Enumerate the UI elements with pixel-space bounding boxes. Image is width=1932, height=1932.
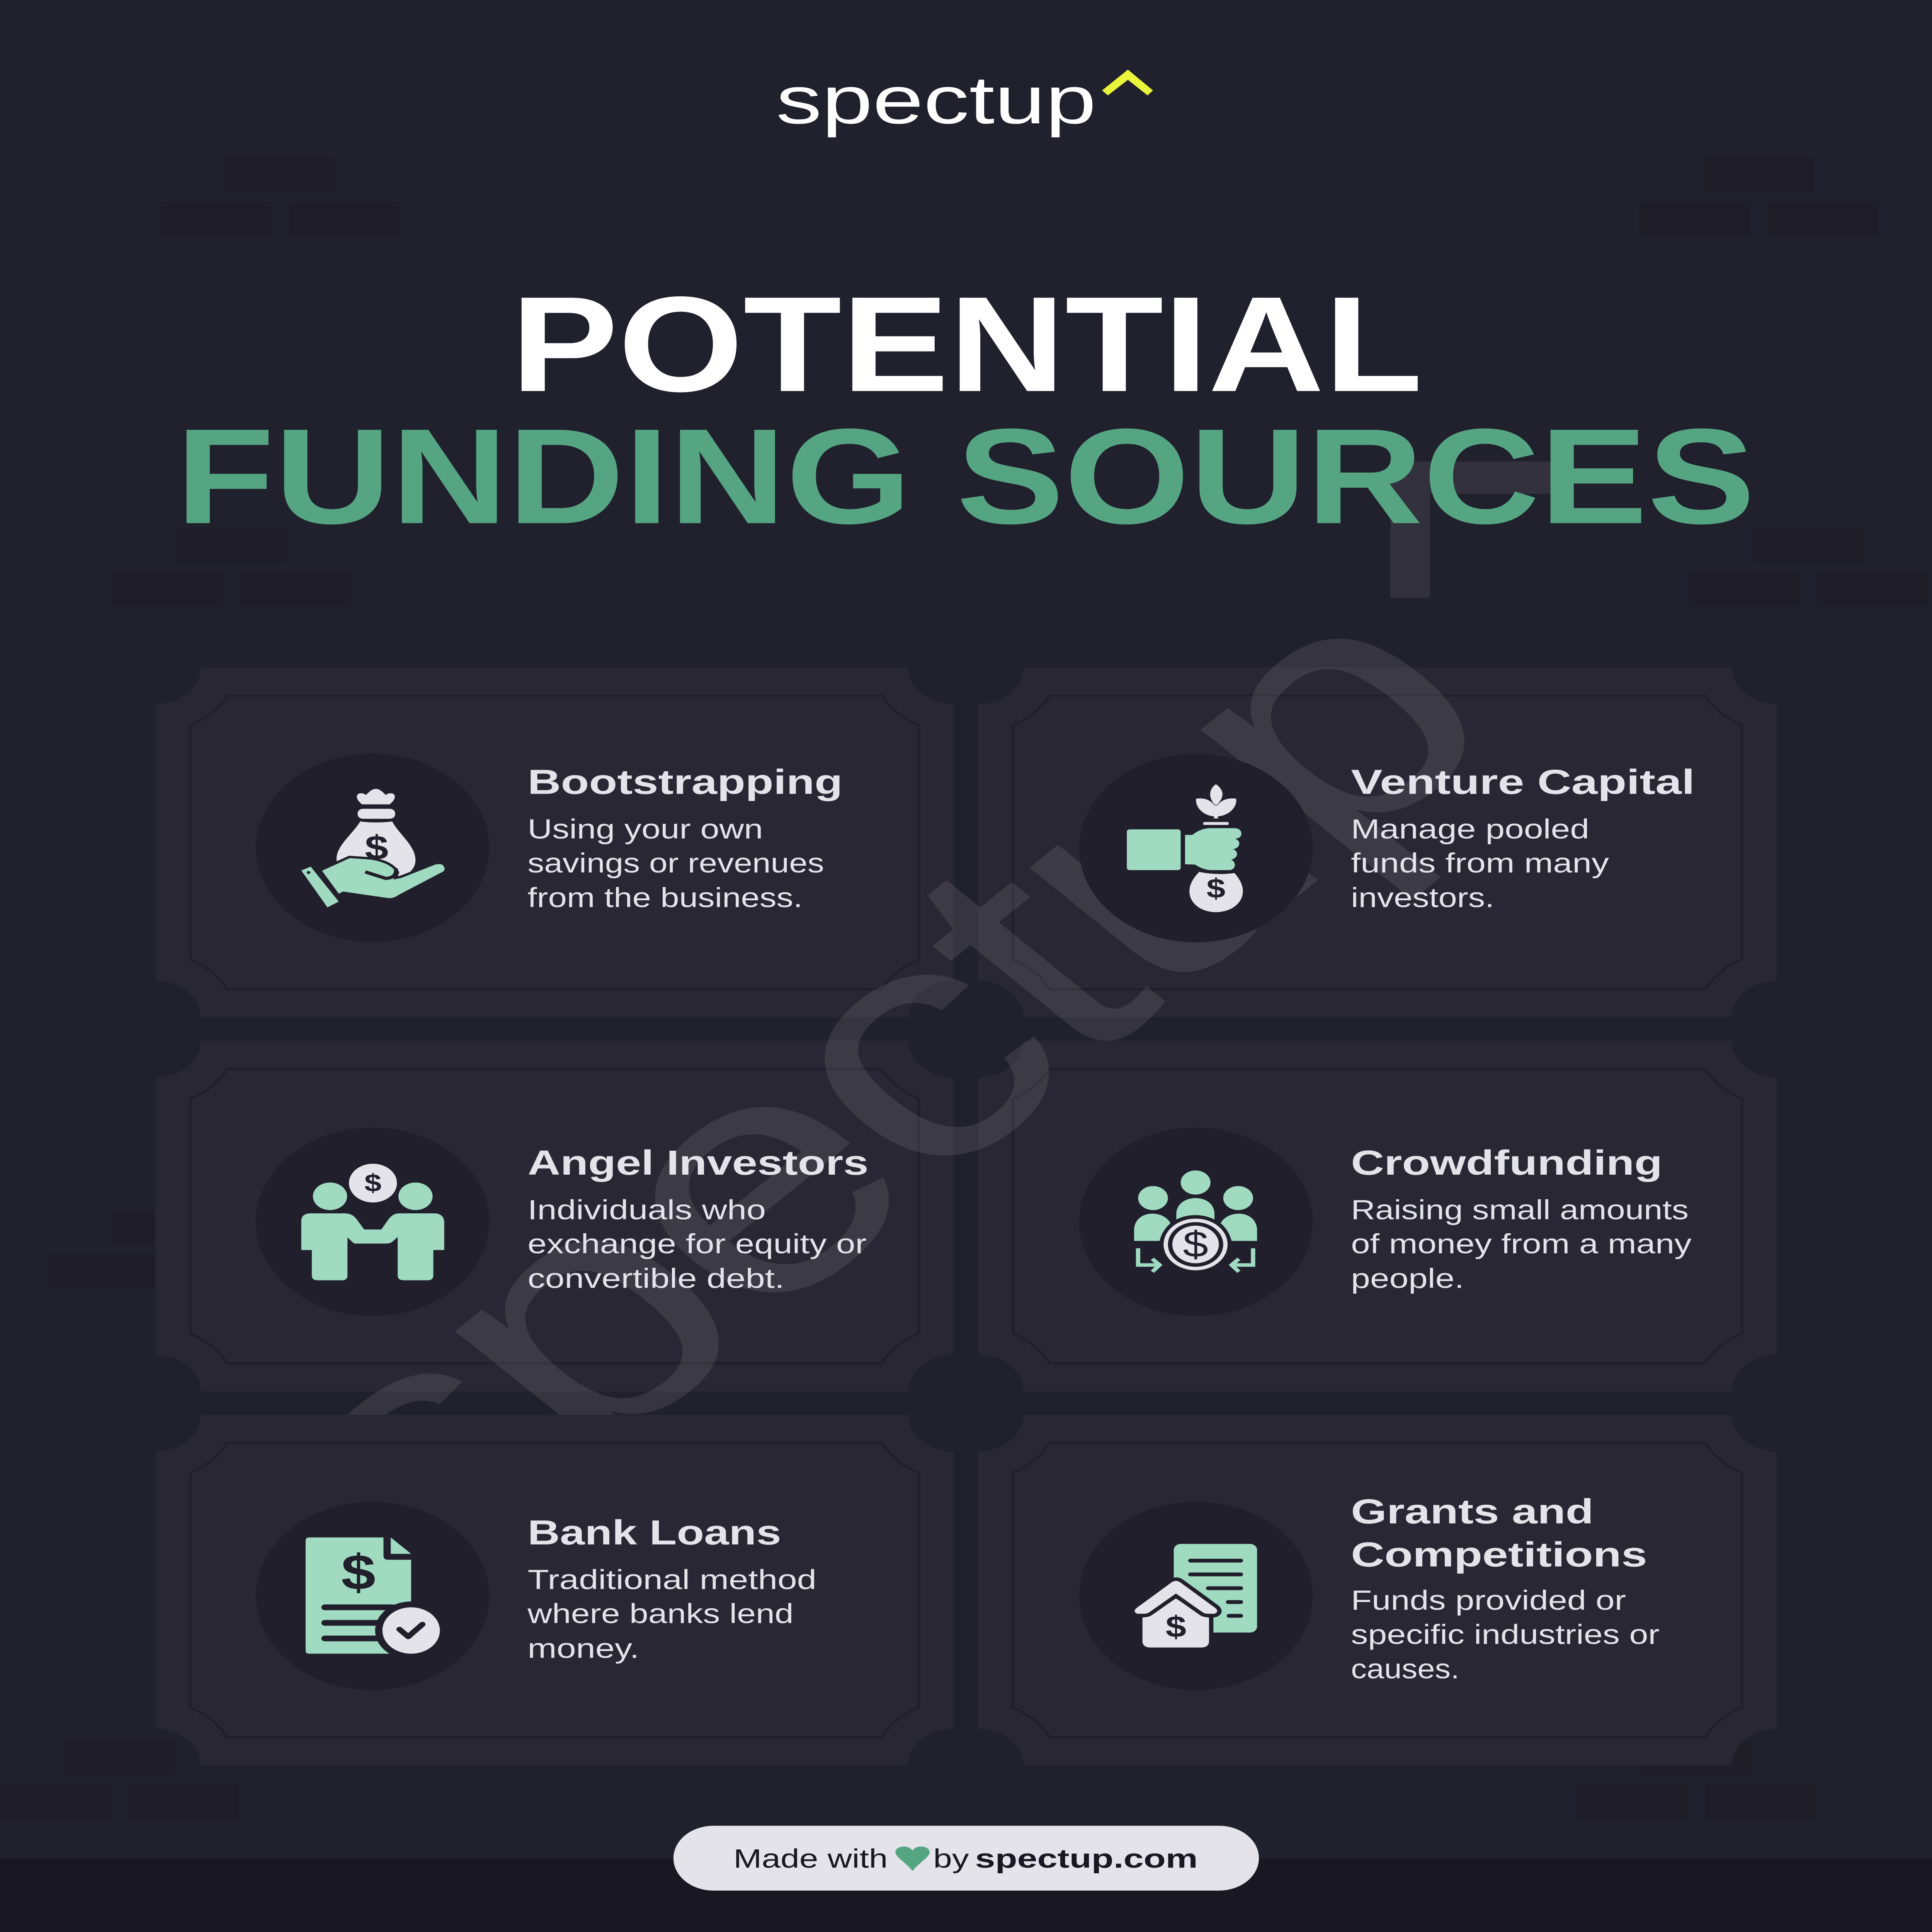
icon: crowd around coin with arrows: $	[1183, 1223, 1208, 1265]
text: Bootstrapping: savings or revenues	[527, 848, 824, 879]
text: Venture Capital: Venture Capital	[1351, 763, 1695, 801]
icon: fist holding sprout and money bag: $	[1207, 873, 1225, 903]
footer pill: made with love by spectup.com: spectup.com	[975, 1844, 1198, 1874]
footer pill: made with love by spectup.com: Made with	[733, 1844, 888, 1874]
panel: Grants and Competitions card	[978, 1415, 1777, 1765]
title: POTENTIAL	[511, 268, 1423, 420]
text: Grants and Competitions: Competitions	[1351, 1536, 1647, 1574]
icon: two people shaking hands with coin: $	[364, 1169, 381, 1197]
title: FUNDING SOURCES	[176, 400, 1755, 552]
footer pill: made with love by spectup.com: by	[933, 1844, 969, 1874]
icon: fist holding sprout and money bag	[1079, 754, 1313, 942]
watermark: rotated spectup logo: spectup	[173, 522, 1565, 1645]
text: Angel Investors: Angel Investors	[527, 1144, 869, 1182]
text: Bootstrapping: Bootstrapping	[527, 763, 843, 801]
panel: Bootstrapping card	[155, 667, 954, 1017]
text: Grants and Competitions: specific industries or	[1351, 1619, 1660, 1650]
icon: document with dollar and check mark	[256, 1502, 489, 1690]
text: Venture Capital: funds from many	[1351, 848, 1609, 879]
text: Grants and Competitions: Funds provided or	[1351, 1585, 1626, 1616]
text: Venture Capital	[1351, 763, 1695, 913]
panel: Crowdfunding card	[978, 1041, 1777, 1391]
text: Bank Loans	[527, 1514, 816, 1664]
icon: money bag on open hand: $	[365, 829, 388, 867]
watermark: rotated spectup logo	[348, 461, 1550, 1415]
footer strip	[0, 1859, 1932, 1932]
text: Crowdfunding: Raising small amounts	[1351, 1194, 1689, 1225]
text: Bank Loans: money.	[527, 1633, 639, 1664]
text: Venture Capital: Manage pooled	[1351, 814, 1589, 845]
text: Angel Investors: convertible debt.	[527, 1263, 784, 1294]
footer pill: made with love by spectup.com	[673, 1826, 1259, 1891]
text: Crowdfunding: Crowdfunding	[1351, 1144, 1662, 1182]
icon: money bag on open hand	[256, 753, 489, 942]
text: Crowdfunding: of money from a many	[1351, 1228, 1692, 1259]
text: Angel Investors	[527, 1144, 869, 1294]
icon: document with dollar and check mark: $	[341, 1544, 376, 1600]
icon: document and house with dollar	[1079, 1502, 1313, 1690]
text: Bootstrapping: from the business.	[527, 883, 803, 913]
text: Bootstrapping	[527, 763, 843, 913]
text: Crowdfunding: people.	[1351, 1263, 1464, 1294]
icon: two people shaking hands with coin	[256, 1128, 489, 1316]
text: Angel Investors: Individuals who	[527, 1194, 766, 1225]
text: Bank Loans: where banks lend	[527, 1599, 794, 1629]
title	[176, 268, 1755, 552]
text: Bank Loans: Bank Loans	[527, 1514, 781, 1552]
text: Crowdfunding	[1351, 1144, 1692, 1294]
text: Bootstrapping: Using your own	[527, 814, 763, 845]
logo: spectup	[776, 62, 1096, 138]
text: Grants and Competitions	[1351, 1492, 1660, 1685]
text: Grants and Competitions: causes.	[1351, 1654, 1459, 1685]
icon: crowd around coin with arrows	[1079, 1128, 1313, 1316]
text: Grants and Competitions: Grants and	[1351, 1492, 1594, 1531]
panel: Bank Loans card	[155, 1415, 954, 1765]
text: Bank Loans: Traditional method	[527, 1565, 816, 1595]
text: Angel Investors: exchange for equity or	[527, 1228, 867, 1259]
icon: document and house with dollar: $	[1166, 1610, 1186, 1643]
text: Venture Capital: investors.	[1351, 883, 1494, 913]
panel: Venture Capital card	[978, 667, 1777, 1017]
panel: Angel Investors card	[155, 1041, 954, 1391]
